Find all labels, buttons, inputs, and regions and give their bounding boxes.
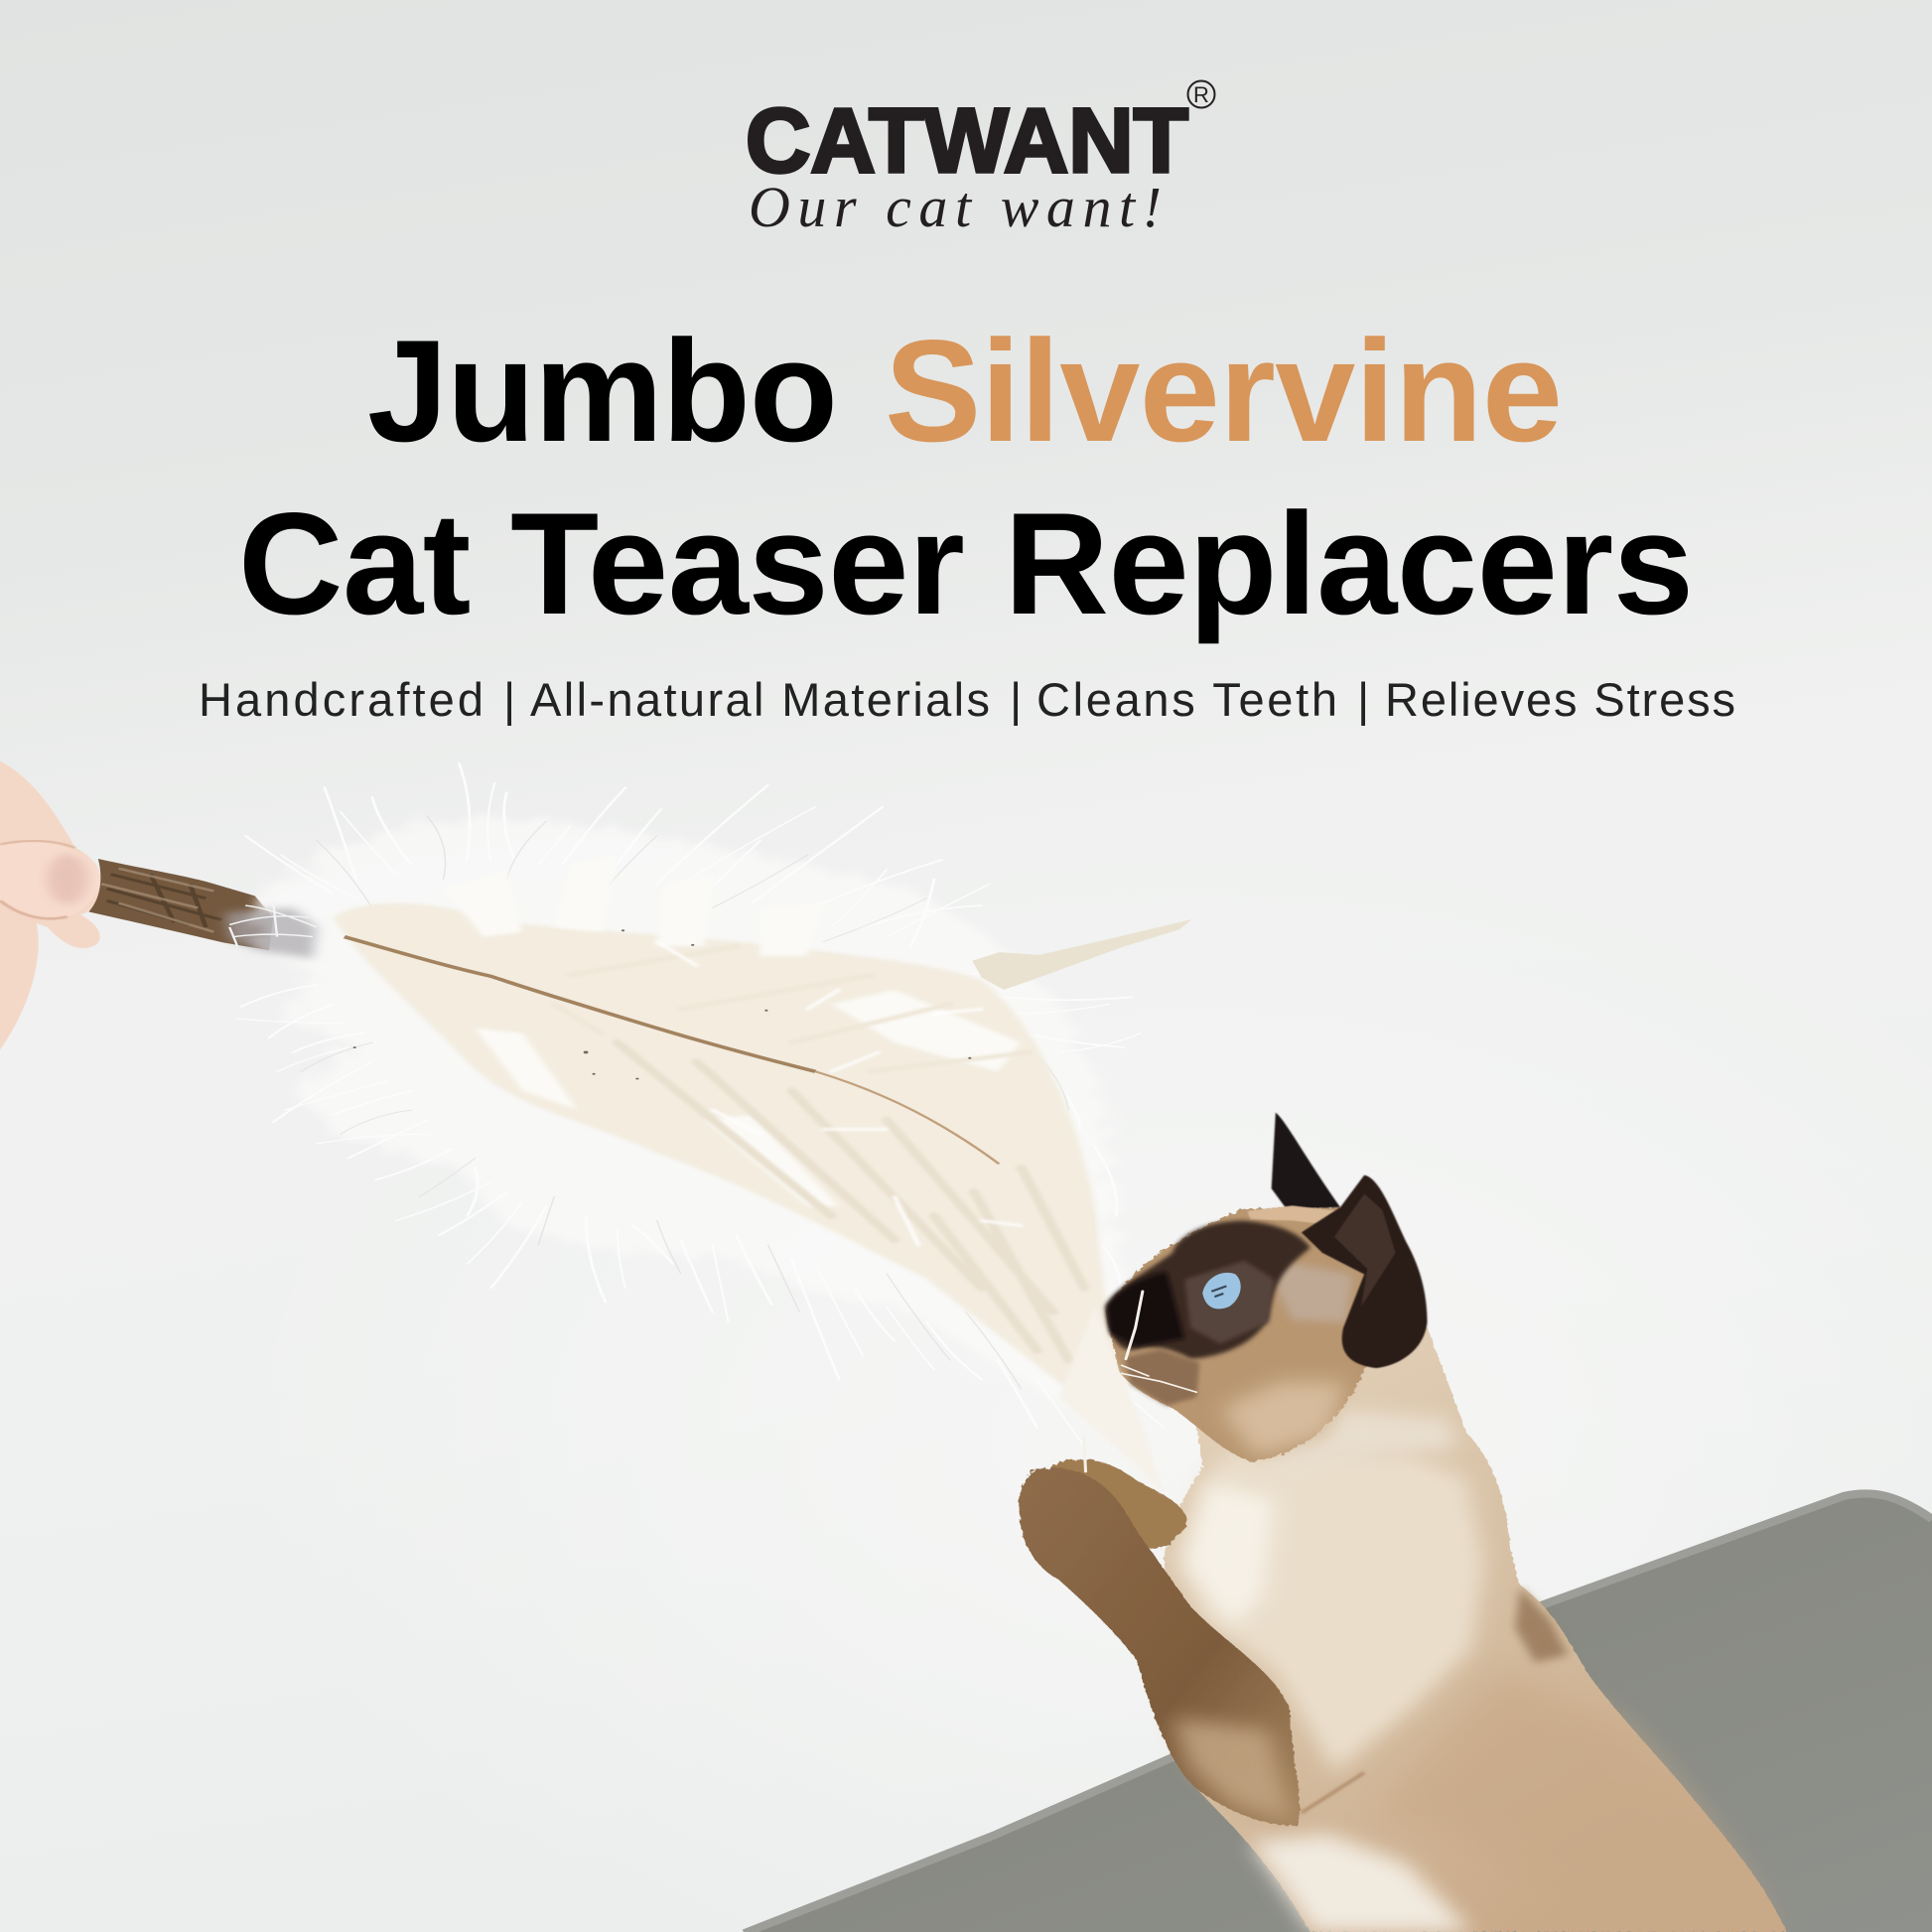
rear paw bbox=[1049, 1459, 1186, 1549]
feather end over paw bbox=[1058, 1307, 1164, 1494]
title word: Silvervine: Silvervine bbox=[885, 310, 1563, 472]
sofa cushion bbox=[745, 1490, 1932, 1932]
feather shaded cream streaks bbox=[554, 941, 1084, 1360]
silvervine stick bbox=[88, 859, 273, 950]
title word: Jumbo: Jumbo bbox=[367, 310, 838, 472]
shoulder shading bbox=[1515, 1587, 1568, 1663]
feather spine tip bbox=[815, 1071, 999, 1164]
subtitle bbox=[199, 673, 1735, 726]
feather base wisps bbox=[229, 900, 317, 946]
eye socket shading bbox=[1184, 1261, 1275, 1344]
front arm and paw bbox=[1020, 1467, 1300, 1826]
near ear bbox=[1302, 1175, 1428, 1368]
pale chest highlight bbox=[1184, 1483, 1275, 1628]
forehead band bbox=[1247, 1205, 1339, 1225]
title bbox=[238, 310, 1694, 644]
white plumes over upper vane bbox=[444, 855, 1022, 1206]
cat body bbox=[1164, 1327, 1787, 1932]
subtitle: All-natural Materials bbox=[530, 673, 990, 726]
subtitle: | bbox=[1357, 673, 1369, 726]
cheek lower fur bbox=[1220, 1381, 1346, 1456]
photo: feather teaser held in hand bbox=[0, 761, 1191, 1480]
cheek highlight bbox=[1263, 1258, 1352, 1322]
title line two: Cat Teaser Replacers bbox=[238, 483, 1694, 644]
sofa piping bbox=[745, 1493, 1932, 1932]
subtitle: Relieves Stress bbox=[1385, 673, 1735, 726]
feather spine bbox=[345, 937, 815, 1071]
white neck fur bbox=[1238, 1408, 1457, 1469]
face mask bbox=[1105, 1221, 1311, 1359]
photo: sofa bbox=[745, 1490, 1932, 1932]
lower back tan bbox=[1376, 1671, 1772, 1932]
whiskers bbox=[1122, 1292, 1196, 1392]
subtitle: | bbox=[1010, 673, 1022, 726]
registered mark: R bbox=[1193, 82, 1209, 107]
nose black bbox=[1107, 1272, 1184, 1346]
cream chest bbox=[1178, 1446, 1484, 1772]
hand bbox=[0, 761, 101, 1049]
logo tagline: Our cat want! bbox=[749, 175, 1163, 239]
feather fluff mass bbox=[253, 816, 1156, 1480]
arm highlight bbox=[1173, 1719, 1293, 1821]
feather strand at paw bbox=[1084, 1435, 1086, 1472]
feather grey base bbox=[225, 907, 317, 958]
feather wisp shadows bbox=[301, 816, 1095, 1389]
white belly bbox=[1251, 1834, 1472, 1932]
muzzle tan bbox=[1125, 1349, 1199, 1406]
feather vane bbox=[333, 903, 1140, 1443]
subtitle: Cleans Teeth bbox=[1036, 673, 1337, 726]
feather torn tip bbox=[972, 919, 1191, 990]
chest crease bbox=[1302, 1772, 1364, 1813]
logo wordmark: CATWANT bbox=[746, 90, 1188, 192]
far ear bbox=[1272, 1113, 1340, 1209]
photo: siamese cat bbox=[1020, 1113, 1787, 1932]
registered mark bbox=[1187, 81, 1215, 107]
logo bbox=[746, 81, 1215, 239]
subtitle: Handcrafted bbox=[199, 673, 483, 726]
subtitle: | bbox=[503, 673, 515, 726]
eye bbox=[1202, 1273, 1241, 1309]
head base bbox=[1105, 1207, 1400, 1461]
feather wisps outer bbox=[237, 763, 1164, 1447]
specks on feather bbox=[353, 929, 971, 1080]
